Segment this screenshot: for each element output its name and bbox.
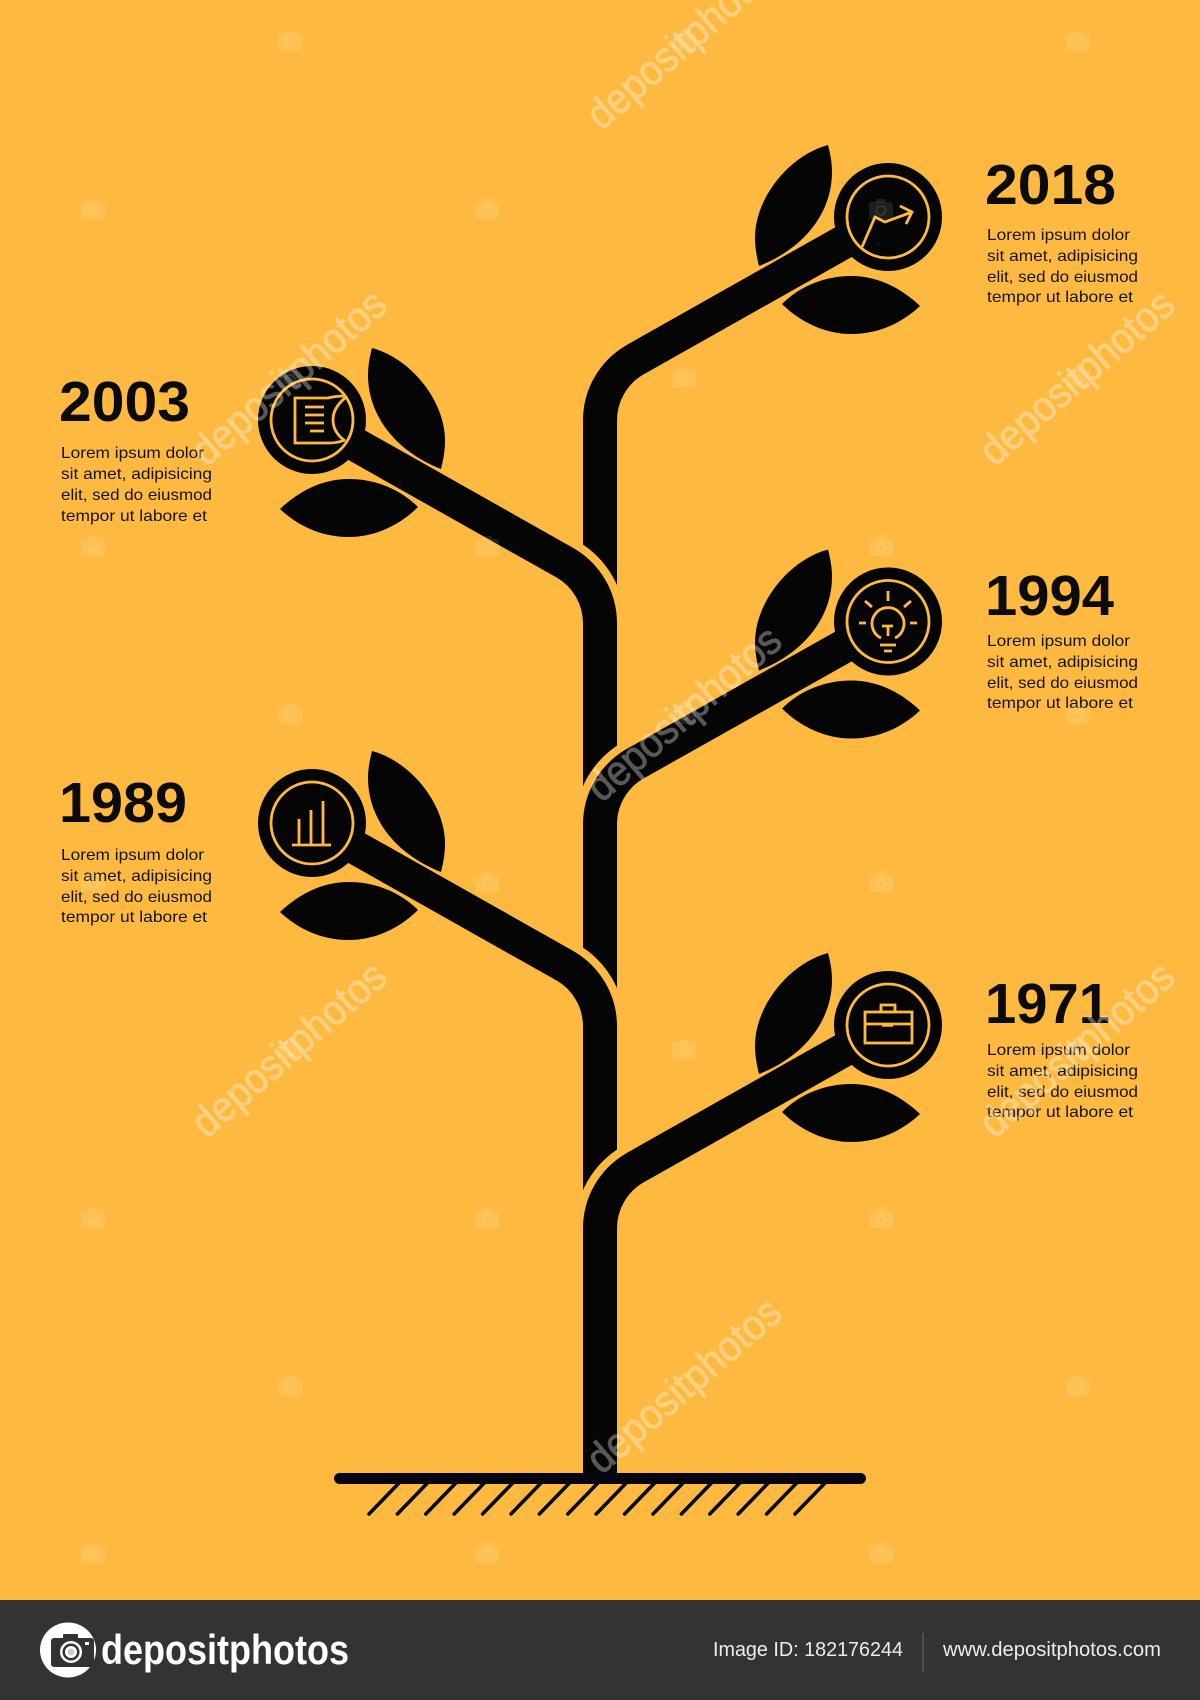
text block 1971: elit, sed do eiusmod xyxy=(987,1084,1138,1101)
text block 2018: sit amet, adipisicing xyxy=(987,248,1138,265)
branch 1971 and trunk xyxy=(600,1025,888,1478)
ring 1994 xyxy=(847,580,929,662)
text block 1994: elit, sed do eiusmod xyxy=(987,675,1138,692)
text block 1989: Lorem ipsum dolor xyxy=(61,847,205,864)
gap around branch 1989 xyxy=(312,823,600,1200)
branch 1989 xyxy=(312,823,600,1200)
text block 2018: elit, sed do eiusmod xyxy=(987,269,1138,286)
watermark text: depositphotos xyxy=(577,1288,790,1482)
watermark text: depositphotos xyxy=(970,952,1183,1146)
year 1989: 1989 xyxy=(59,771,187,835)
watermark text: depositphotos xyxy=(182,952,395,1146)
circle 1989 xyxy=(258,769,366,877)
leaf lower 1971 xyxy=(782,1084,920,1142)
footer divider xyxy=(922,1633,924,1672)
text block 1994: tempor ut labore et xyxy=(987,695,1134,712)
leaf upper 1989 xyxy=(368,751,445,872)
branch 2003 xyxy=(312,420,600,800)
text block 1971: tempor ut labore et xyxy=(987,1104,1134,1121)
tree trunk and branches xyxy=(312,217,888,1478)
text block 2003: Lorem ipsum dolor xyxy=(61,445,205,462)
logo xyxy=(40,1622,349,1678)
text block 2003: elit, sed do eiusmod xyxy=(61,487,212,504)
gap around branch 1994 xyxy=(600,622,888,1000)
leaf upper 2018 xyxy=(755,145,832,266)
node 2003 xyxy=(59,348,445,537)
node 1994 xyxy=(755,550,1138,738)
text block 2003 xyxy=(61,445,212,525)
leaf upper 2003 xyxy=(368,348,445,469)
branch 2018 xyxy=(600,217,888,600)
branch 1994 xyxy=(600,622,888,1000)
text block 2018: Lorem ipsum dolor xyxy=(987,227,1131,244)
text block 1989: sit amet, adipisicing xyxy=(61,868,212,885)
text block 1971: Lorem ipsum dolor xyxy=(987,1042,1131,1059)
ring 1989 xyxy=(271,782,353,864)
website url: www.depositphotos.com xyxy=(942,1639,1161,1661)
watermark text xyxy=(182,0,1183,1482)
text block 2018 xyxy=(987,227,1138,306)
gap around branch 2003 xyxy=(312,420,600,800)
ground line xyxy=(334,1473,866,1484)
icon: bar chart xyxy=(292,801,331,845)
circle 2003 xyxy=(258,366,366,474)
leaf lower 1994 xyxy=(782,680,920,738)
leaf lower 2003 xyxy=(280,479,418,537)
circle 1971 xyxy=(834,971,942,1079)
text block 1994: Lorem ipsum dolor xyxy=(987,633,1131,650)
image id: Image ID: 182176244 xyxy=(713,1639,903,1661)
text block 1989: tempor ut labore et xyxy=(61,909,208,926)
icon: light bulb xyxy=(859,591,917,651)
ring 1971 xyxy=(847,984,929,1066)
footer bar xyxy=(0,1600,1200,1700)
watermark text: depositphotos xyxy=(970,280,1183,474)
leaf lower 1989 xyxy=(280,882,418,940)
icon: camera logo xyxy=(40,1622,96,1678)
year 1994: 1994 xyxy=(985,564,1114,628)
node 1971 xyxy=(755,953,1138,1142)
ring 2003 xyxy=(271,379,353,461)
node 1989 xyxy=(59,751,445,940)
text block 2018: tempor ut labore et xyxy=(987,289,1134,306)
leaf upper 1994 xyxy=(755,550,832,670)
text block 1989: elit, sed do eiusmod xyxy=(61,889,212,906)
watermark camera grid xyxy=(81,31,1090,1563)
node 2018 xyxy=(755,145,1138,334)
text block 1971: sit amet, adipisicing xyxy=(987,1063,1138,1080)
year 1971: 1971 xyxy=(985,972,1110,1036)
text block 2003: tempor ut labore et xyxy=(61,508,208,525)
icon: briefcase xyxy=(865,1005,912,1043)
year 2003: 2003 xyxy=(59,370,190,434)
text block 1989 xyxy=(61,847,212,926)
circle 2018 xyxy=(834,163,942,271)
year 2018: 2018 xyxy=(985,153,1116,217)
text block 1971 xyxy=(987,1042,1138,1121)
text block 1994 xyxy=(987,633,1138,712)
gap around branch 1971 xyxy=(600,1025,888,1478)
watermark text: depositphotos xyxy=(577,616,790,810)
ground hatching xyxy=(369,1482,826,1514)
circle 1994 xyxy=(834,568,942,676)
logo wordmark: depositphotos xyxy=(101,1626,349,1673)
text block 1994: sit amet, adipisicing xyxy=(987,654,1138,671)
leaf lower 2018 xyxy=(782,276,920,334)
icon: document xyxy=(295,396,345,443)
leaf upper 1971 xyxy=(755,953,832,1074)
icon: rising arrow xyxy=(862,206,912,247)
watermark text: depositphotos xyxy=(182,280,395,474)
ring 2018 xyxy=(847,176,929,258)
text block 2003: sit amet, adipisicing xyxy=(61,466,212,483)
